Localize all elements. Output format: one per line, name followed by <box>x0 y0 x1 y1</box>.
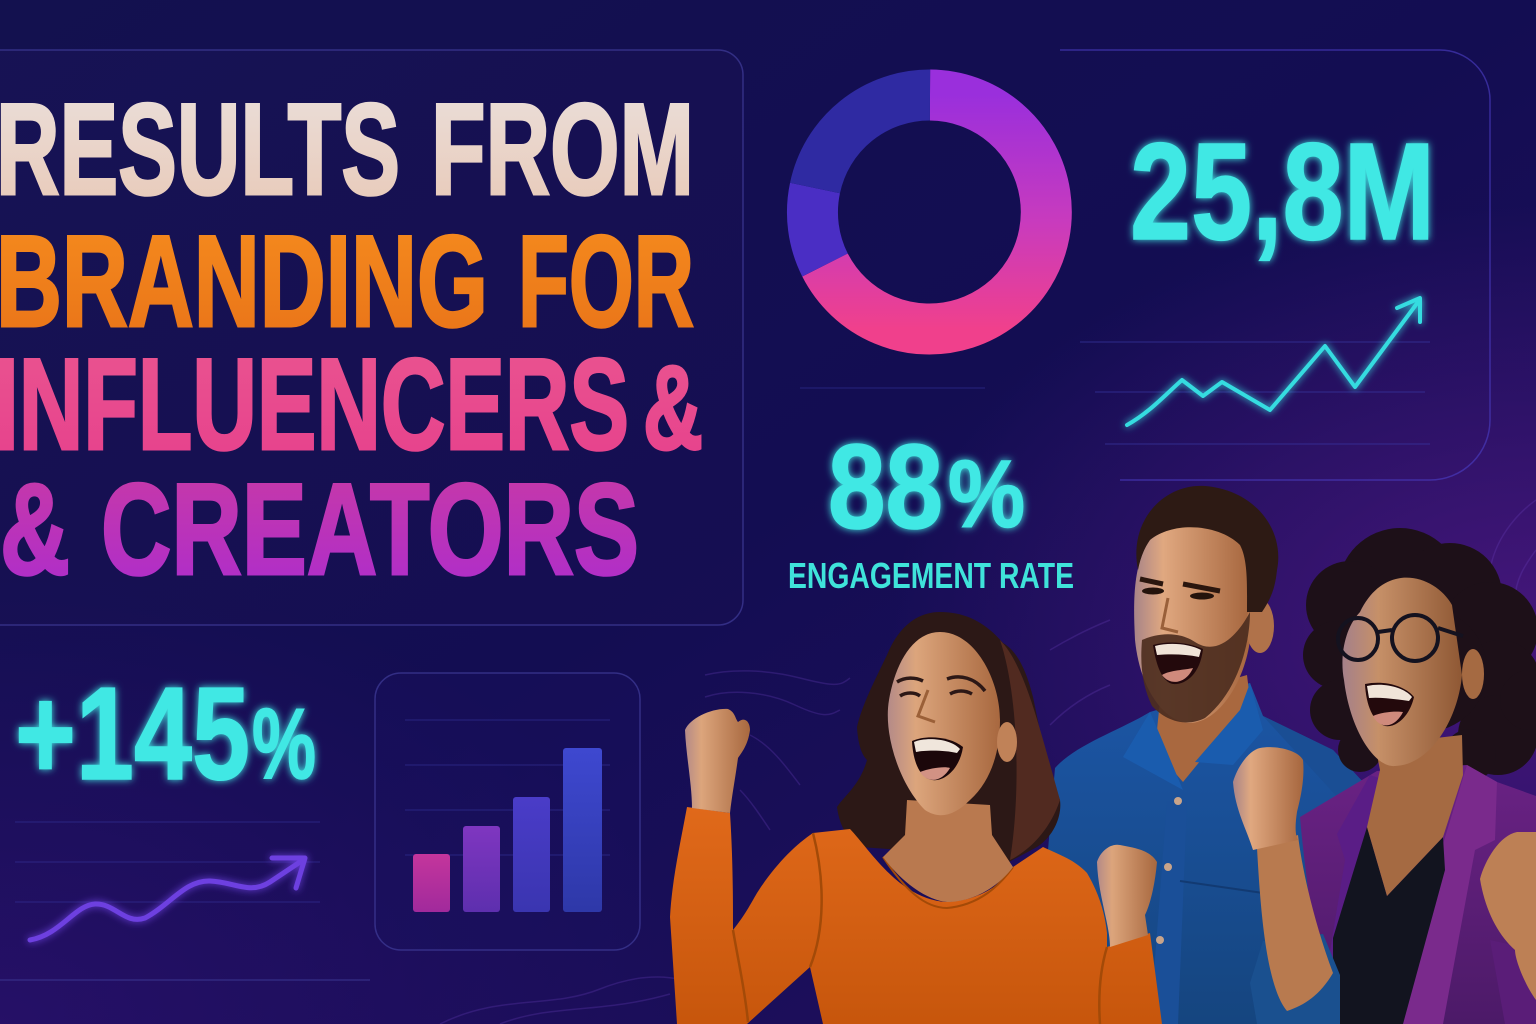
panel: title <box>0 50 743 625</box>
fist: right <box>1097 845 1157 947</box>
heading: title text: FOR <box>518 208 694 354</box>
panel: reach metric <box>1060 50 1490 480</box>
head <box>1342 578 1462 766</box>
arm and fist: raised <box>1233 747 1340 1024</box>
stat value: 88% <box>828 420 1025 554</box>
hair <box>1136 486 1278 612</box>
heading: title text: INFLUENCERS <box>0 331 629 477</box>
head <box>1134 526 1250 723</box>
heading: title text: BRANDING <box>0 208 488 354</box>
person: woman in orange sweater <box>670 612 1162 1024</box>
heading: title text: RESULTS <box>0 76 400 222</box>
stat value: 88%: % <box>948 441 1025 548</box>
stat: engagement rate <box>788 388 1074 596</box>
mouth <box>1153 642 1203 684</box>
person: man in blue shirt <box>1048 486 1370 1024</box>
stat: +145%: % <box>252 688 316 800</box>
line chart: reach trend <box>1127 298 1420 425</box>
shirt <box>1048 683 1370 1024</box>
bars <box>413 748 602 912</box>
blazer <box>1300 765 1536 1024</box>
mouth <box>1365 683 1414 726</box>
stat value: 88%: 88 <box>828 420 943 554</box>
sweater <box>670 807 1162 1024</box>
chart: donut <box>812 95 1046 329</box>
glasses <box>1338 615 1463 661</box>
hair <box>837 612 1060 863</box>
heading: title text: CREATORS <box>101 456 639 602</box>
line chart: growth trend <box>30 858 305 940</box>
stat: 25,8M: 25,8M <box>1130 115 1435 269</box>
stat label: ENGAGEMENT RATE <box>788 555 1074 596</box>
neck <box>1367 735 1463 896</box>
mouth <box>912 737 963 780</box>
arm and fist: right <box>1480 832 1536 1024</box>
heading: title text: FROM <box>431 76 694 222</box>
beard <box>1141 612 1250 722</box>
fist: left <box>685 709 750 813</box>
heading: title text <box>0 76 703 602</box>
heading: title text: & <box>0 456 70 602</box>
stat: +145%: +145 <box>15 660 250 807</box>
neck <box>883 800 1013 902</box>
panel: growth metric <box>0 660 370 980</box>
curly hair <box>1303 528 1536 781</box>
heading: title text: & <box>643 341 703 475</box>
eyes and brows <box>897 677 985 691</box>
person: woman with glasses <box>1233 528 1536 1024</box>
black top <box>1333 827 1445 1024</box>
head <box>888 632 1000 815</box>
panel: bar chart <box>375 673 640 950</box>
eyes <box>1142 588 1214 600</box>
